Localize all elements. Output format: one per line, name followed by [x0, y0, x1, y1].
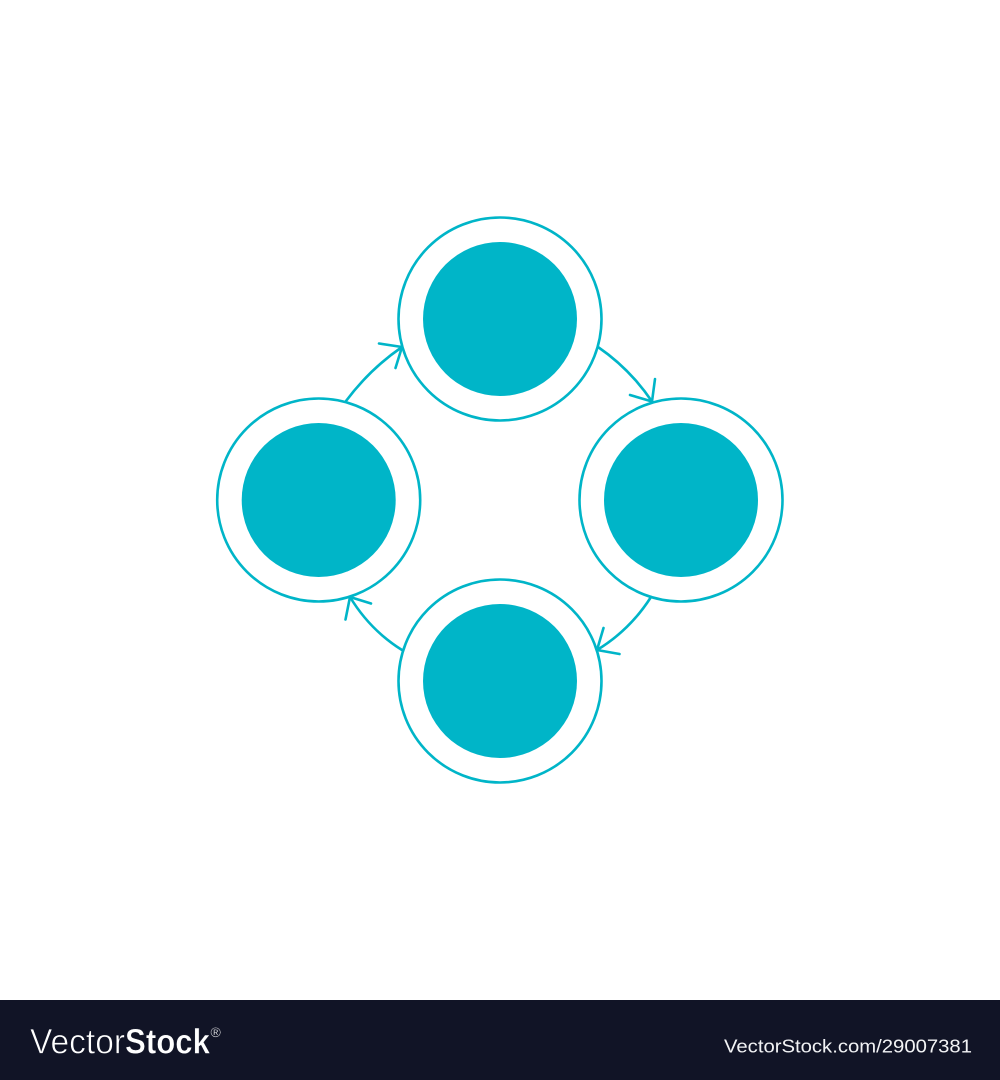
footer logo: VectorStock: Vector [30, 1022, 125, 1062]
footer logo: VectorStock [30, 1022, 222, 1062]
arrow: right to bottom [597, 597, 651, 654]
node: left circle [217, 398, 420, 602]
node: top circle [398, 218, 602, 420]
node: right circle [580, 398, 782, 602]
footer bar [0, 1000, 1000, 1080]
arrow: bottom to left [346, 597, 402, 650]
footer image id: VectorStock.com/29007381 [724, 1036, 972, 1056]
footer logo: VectorStock: Stock [125, 1022, 210, 1062]
footer logo: VectorStock: ® [210, 1024, 222, 1040]
node: bottom circle [398, 580, 602, 782]
cycle diagram [217, 218, 782, 782]
arrow: left to top [346, 344, 402, 401]
arrow: top to right [598, 347, 655, 402]
